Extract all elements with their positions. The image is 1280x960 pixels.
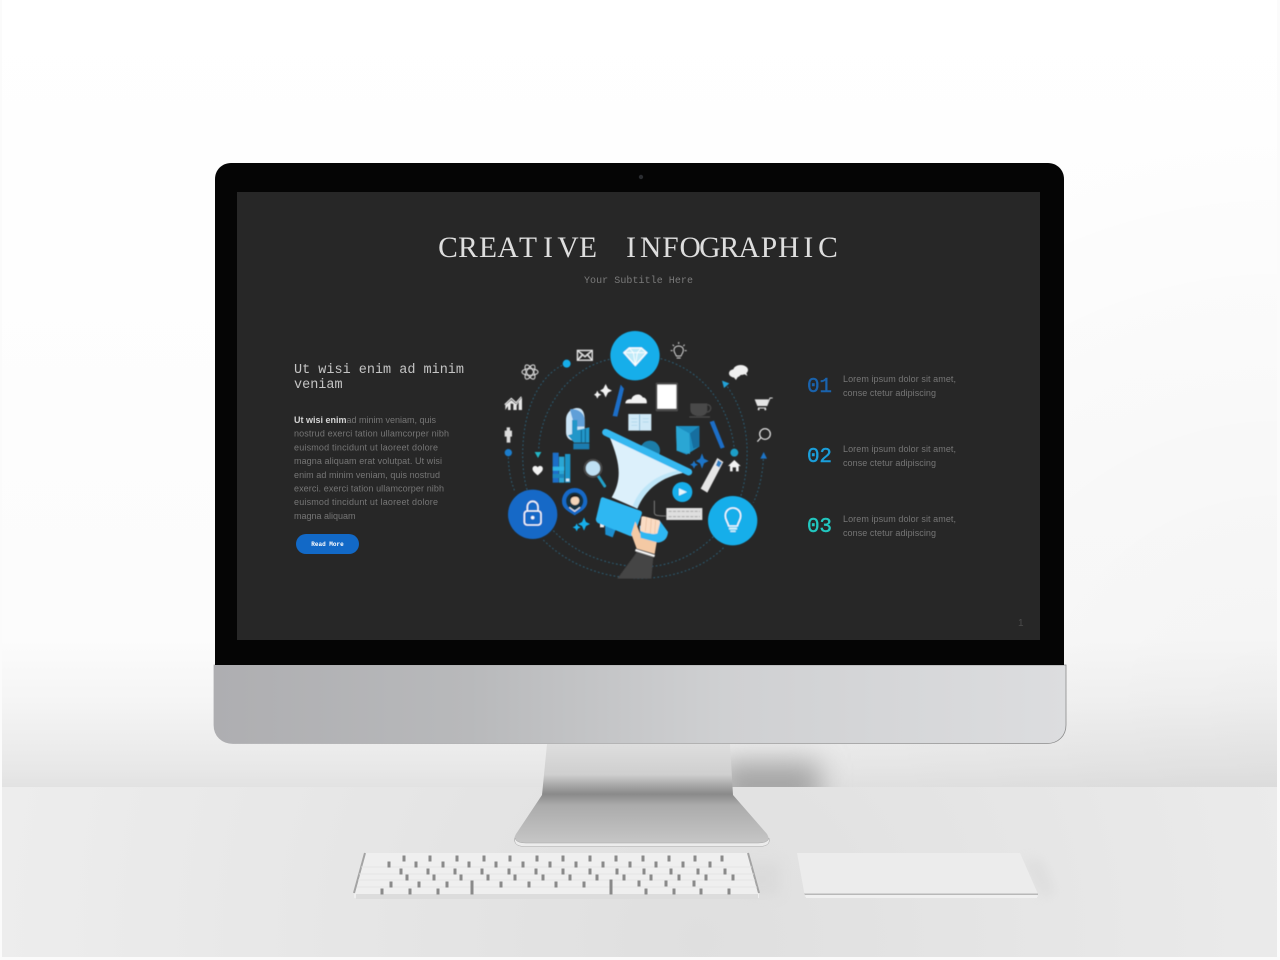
item 02: 02 [807,446,832,469]
item 02: Lorem ipsum dolor sit amet, [843,444,956,454]
icon: growth chart [505,397,522,410]
left body text: nostrud exerci tation ullamcorper nibh [294,428,449,438]
icon: diamond badge [610,331,660,380]
left heading: Ut wisi enim ad minim [294,363,464,378]
icon: pencil left [613,385,624,417]
stand base edge [515,838,769,846]
background: desk [0,787,1280,960]
icon: hand on screen [566,408,589,449]
icon: sparkle bottom [573,517,590,531]
icon: dome behind megaphone [640,441,660,461]
icon: lightbulb badge [708,496,757,545]
keyboard [354,853,780,899]
icon: person [505,427,512,443]
icon: pencil right [710,421,725,449]
icon: open book [628,414,651,431]
left heading [294,363,464,393]
central megaphone illustration [505,331,773,579]
left body text: magna aliquam erat volutpat. Ut wisi [294,456,442,466]
read more button: Read More [311,541,344,548]
item 01 [807,374,956,399]
monitor bezel [215,163,1064,665]
item 01: Lorem ipsum dolor sit amet, [843,374,956,384]
left body text [294,415,449,521]
icon: heart [533,466,543,475]
icon: hand holding megaphone [617,516,668,579]
left body text: Ut wisi enimad minim veniam, quis [294,415,437,425]
icon: play button [672,482,692,502]
icon: ruler [701,458,723,493]
icon: profile pin [562,488,587,515]
item 03: 03 [807,516,832,539]
icon: tablet [656,383,678,411]
icon: folder pocket [676,426,699,455]
left body text: euismod tincidunt ut laoreet dolore [294,442,438,452]
icon: cloud [625,394,647,403]
icon: megaphone [596,432,689,537]
icon: magnifier color [585,460,605,486]
orbit nodes and arrows [505,360,767,459]
icon: sparkle top [594,384,612,399]
dashed orbit rings [508,359,763,578]
icon: atom [522,363,538,381]
page number: 1 [1018,618,1024,629]
webcam [639,175,643,179]
stand shadow [720,762,820,812]
icon: speech bubbles [729,365,748,380]
left body text: enim ad minim veniam, quis nostrud [294,470,440,480]
left heading: veniam [294,378,343,393]
item 03 [807,514,956,539]
icon: keyboard with cable [654,501,702,520]
item 01: 01 [807,376,832,399]
subtitle: Your Subtitle Here [584,275,693,287]
read more button [296,534,359,554]
item 02: conse ctetur adipiscing [843,458,936,468]
icon: sparkle right [690,453,709,469]
item 03: conse ctetur adipiscing [843,528,936,538]
left body text: exerci. exerci tation ullamcorper nibh [294,484,444,494]
item 01: conse ctetur adipiscing [843,388,936,398]
icon: cart [755,398,773,410]
icon: home [728,460,741,471]
icon: idea bulb outline [671,342,687,358]
item 03: Lorem ipsum dolor sit amet, [843,514,956,524]
monitor body [214,163,1066,744]
left body text: magna aliquam [294,511,356,521]
icon: magnifier outline [757,429,770,442]
monitor stand [514,744,769,846]
keyboard key gaps [381,856,734,894]
item 02 [807,444,956,469]
monitor chin [214,665,1066,744]
trackpad [797,853,1056,898]
left body text: euismod tincidunt ut laoreet dolore [294,497,438,507]
title: CREATIVEINFOGRAPHIC [438,232,838,264]
screen panel [237,192,1040,640]
icon: books [553,453,570,483]
icon: coffee cup [689,403,711,418]
icon: lock badge [508,490,557,539]
icon: envelope [577,350,592,360]
